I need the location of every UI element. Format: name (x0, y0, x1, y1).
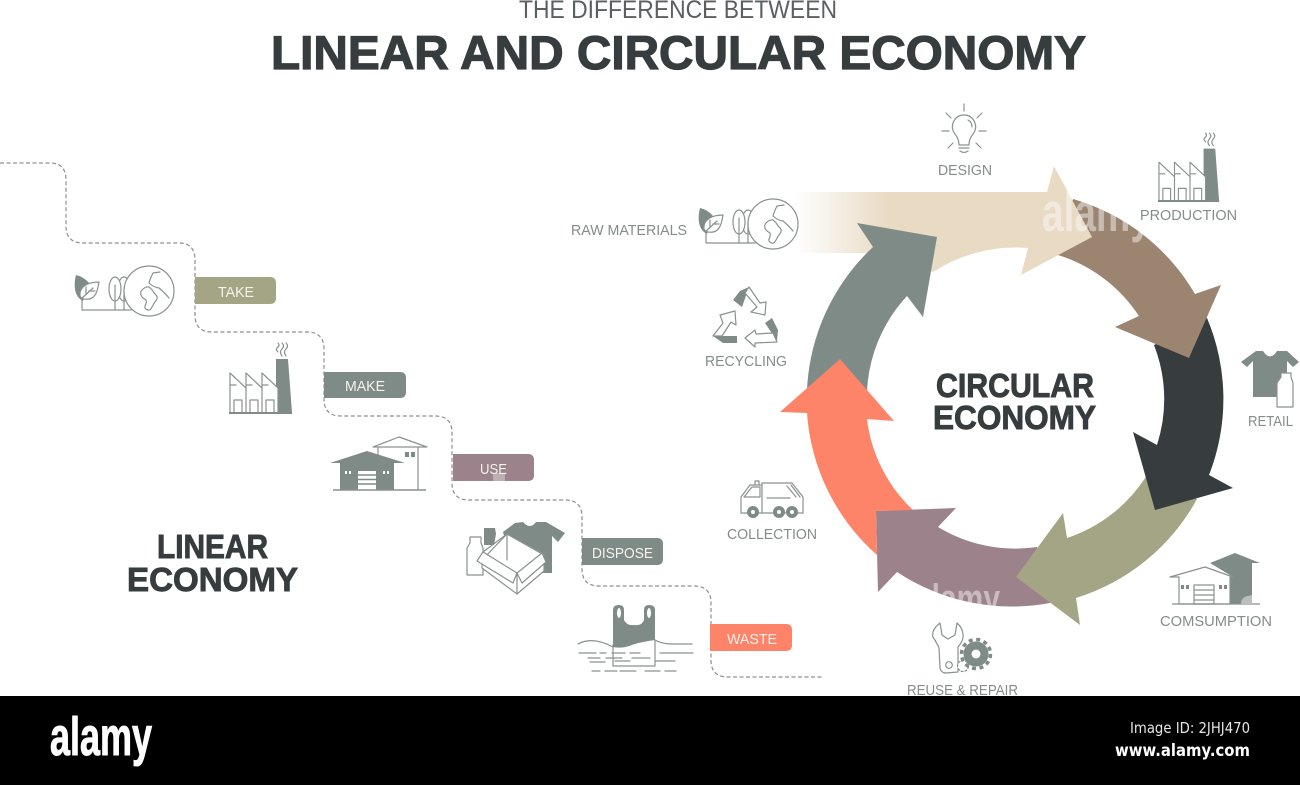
panel: linear economy (0, 163, 823, 677)
icon: production factory (1158, 133, 1219, 201)
heading: circular economy: ECONOMY (933, 399, 1096, 436)
heading: circular economy: CIRCULAR (936, 367, 1094, 404)
icon: plastic bag in water (578, 605, 693, 671)
arrow: consumption (1016, 475, 1197, 625)
arrow: recycling (807, 223, 937, 392)
label: recycling: RECYCLING (705, 353, 787, 370)
heading: circular economy (933, 367, 1096, 436)
label: retail: RETAIL (1248, 413, 1293, 430)
label: production: PRODUCTION (1140, 207, 1237, 224)
heading: linear economy: LINEAR (157, 528, 268, 565)
panel: circular economy (571, 104, 1299, 699)
step: take tag (195, 277, 276, 304)
icon: recycling (713, 287, 778, 347)
title (271, 0, 1086, 79)
icon: warehouse house (330, 437, 427, 490)
footer band (0, 696, 1300, 785)
icon: garbage truck (741, 481, 803, 516)
footer logo: alamy (50, 707, 152, 767)
footer image id: Image ID: 2JHJ470 (1130, 719, 1250, 737)
icon: wrench and gears (933, 623, 990, 673)
step: use tag: USE (480, 461, 507, 478)
icon: raw materials earth (699, 199, 798, 249)
step: waste tag (710, 624, 792, 651)
icon: box, shirt and bottles (467, 522, 565, 594)
label: collection: COLLECTION (727, 526, 817, 543)
step: use tag (453, 454, 534, 481)
step: make tag: MAKE (345, 378, 385, 395)
icon: shirt and bottle (1241, 351, 1299, 407)
step: dispose tag: DISPOSE (592, 545, 653, 562)
heading: linear economy: ECONOMY (127, 561, 298, 598)
step: waste tag: WASTE (727, 631, 777, 648)
main title: LINEAR AND CIRCULAR ECONOMY (271, 26, 1086, 79)
watermark on arrows: alamy (1042, 181, 1152, 243)
watermark on arrows (915, 181, 1152, 621)
heading: linear economy (127, 528, 298, 598)
label: design: DESIGN (938, 162, 992, 179)
label: reuse and repair: REUSE & REPAIR (907, 682, 1018, 699)
icon: earth and plants (75, 266, 174, 316)
arrow: reuse and repair (876, 508, 1050, 607)
step: dispose tag (582, 538, 663, 565)
arrow: collection (780, 359, 913, 555)
icon: light bulb (942, 104, 986, 152)
footer url: www.alamy.com (1115, 741, 1250, 761)
arrow: retail (1133, 318, 1233, 510)
dashed stepped path (0, 163, 823, 677)
label: raw materials: RAW MATERIALS (571, 222, 687, 239)
step: take tag: TAKE (218, 284, 254, 301)
label: consumption: COMSUMPTION (1160, 613, 1272, 630)
arrow: production (1058, 199, 1221, 358)
arrow: raw materials and design (790, 166, 1092, 275)
icon: consumption house (1170, 553, 1260, 604)
step: make tag (324, 372, 406, 398)
icon: factory (229, 343, 292, 413)
watermark on arrows: alamy (915, 577, 1001, 621)
